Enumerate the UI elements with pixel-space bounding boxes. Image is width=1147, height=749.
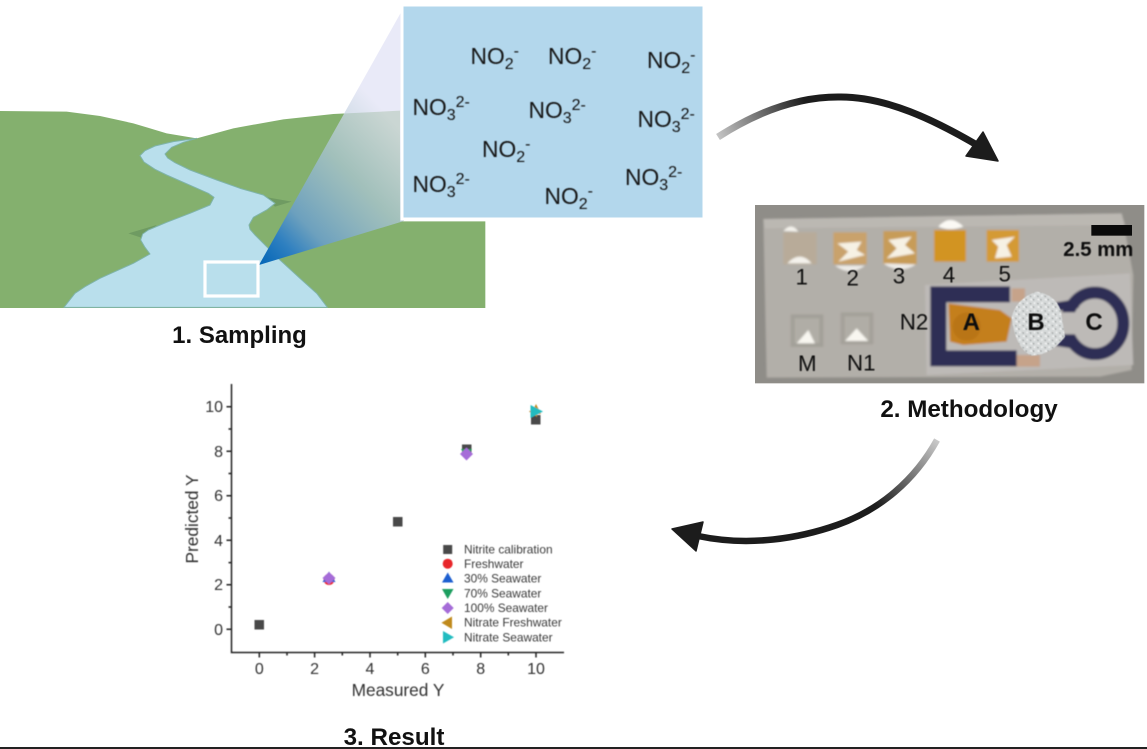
ion labels: 2- [681,106,695,123]
axis titles [182,474,445,700]
y tick labels: 2 [214,577,223,594]
ion labels: 3 [659,177,668,194]
ion labels: NO [482,136,516,162]
ion labels: NO [638,106,672,132]
x tick labels: 6 [421,661,430,678]
photo labels: 4 [943,262,955,287]
y tick labels: 8 [214,444,223,461]
ion labels: 3 [672,119,681,136]
heading: 2. Methodology: 2. Methodology [880,396,1058,423]
photo background [755,205,1144,383]
ion labels: 2 [681,60,690,77]
legend: 100% Seawater [464,601,548,615]
legend: Nitrate Freshwater [464,616,562,630]
x tick labels: 10 [527,661,545,678]
x tick labels: 0 [255,661,264,678]
legend: 30% Seawater [464,572,541,586]
panel: water ions [402,5,704,219]
legend: Nitrite calibration [464,542,553,556]
ion labels: 2 [505,56,514,73]
heading: 1. Sampling: 1. Sampling [172,322,307,349]
foil electrode B [1012,292,1065,356]
callout cone [259,7,404,265]
photo labels: B [1027,309,1045,336]
ion labels: - [525,136,530,153]
y tick labels: 4 [214,533,223,550]
data points [254,404,543,630]
photo labels: 2 [846,265,859,290]
x tick labels: 8 [476,661,485,678]
ion labels: 3 [447,107,456,124]
ion labels: 2- [668,164,682,181]
ion labels: 2 [579,196,588,213]
y tick labels: 0 [214,622,223,639]
photo labels: N2 [900,309,928,334]
scale bar: 2.5 mm [1063,239,1133,261]
ion labels: - [690,47,695,64]
x tick labels: 4 [366,661,375,678]
axes [226,384,564,658]
ion labels: NO [470,43,505,69]
y tick labels: 10 [205,399,223,416]
illustration: river landscape [0,111,485,308]
ion labels: NO [647,47,681,73]
arrow: methodology to result [672,440,937,551]
photo labels [795,262,1103,376]
axis titles: Predicted Y [182,474,202,564]
ion labels: NO [544,183,579,209]
ion labels: - [591,43,596,60]
ion labels: 2- [572,97,586,114]
photo labels: 1 [795,265,808,290]
photo labels: A [963,309,980,336]
legend: Freshwater [464,557,524,571]
bottom rule [0,747,1147,749]
scatter chart [182,384,564,700]
y tick labels [205,399,223,639]
glass slide and device [763,213,1133,378]
ion labels [412,43,695,213]
arrow: sampling to methodology [718,97,998,161]
x tick labels: 2 [310,661,319,678]
photo: paper sensor device [755,205,1144,383]
ion labels: - [514,43,519,60]
photo labels: M [798,351,817,376]
ion labels: 3 [447,184,456,201]
green hills [0,111,485,308]
ion labels: NO [548,43,582,69]
ion labels: 2 [582,56,591,73]
scale bar [1063,225,1133,261]
legend [442,542,562,644]
ion labels: NO [625,164,659,190]
ion labels: NO [412,171,447,197]
photo labels: N1 [847,351,876,376]
axis titles: Measured Y [352,680,445,700]
legend: Nitrate Seawater [464,630,553,644]
photo labels: 5 [998,262,1011,287]
y tick labels: 6 [214,488,223,505]
ion labels: 2- [456,171,470,188]
ion labels: 2 [516,149,525,166]
ion labels: NO [412,94,447,120]
legend: 70% Seawater [464,586,541,600]
photo labels: 3 [893,263,905,288]
x tick labels [255,661,545,678]
river [64,138,327,307]
ion labels: 3 [563,110,572,127]
sampling location box [205,262,258,296]
panel background [402,5,704,219]
ion labels: - [588,183,593,200]
ion labels: NO [528,97,563,123]
photo labels: C [1085,309,1103,336]
ion labels: 2- [456,94,470,111]
